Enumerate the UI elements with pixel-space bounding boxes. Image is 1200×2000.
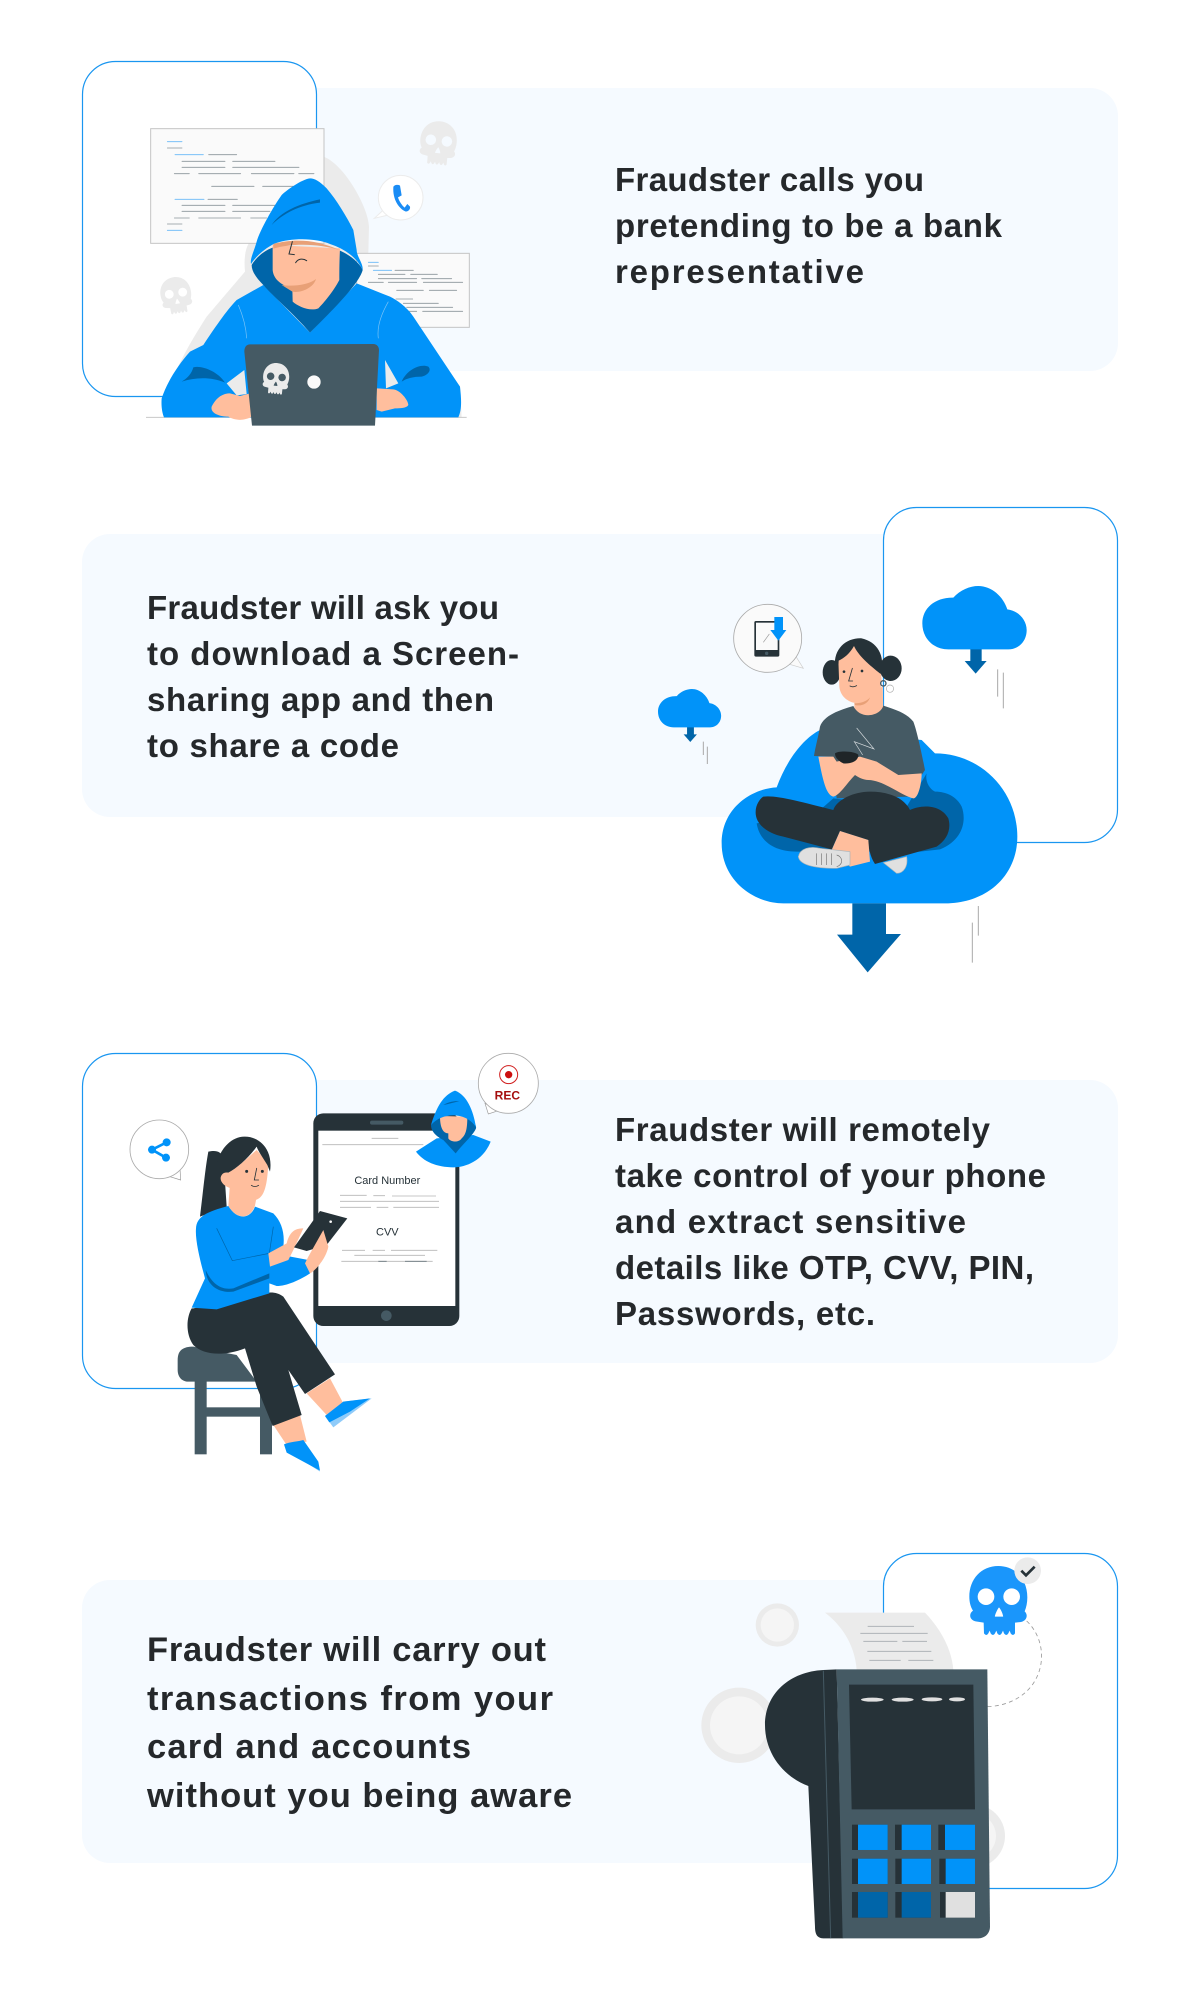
ring small	[756, 1603, 799, 1647]
beanbag shadow	[757, 773, 964, 852]
stool	[178, 1347, 272, 1454]
panel: step 4 card transactions	[82, 1554, 1118, 1938]
panel: step 1 fraudster calls	[82, 62, 1118, 426]
shin	[832, 831, 870, 867]
hair	[835, 638, 882, 674]
terminal edge highlight	[823, 1671, 831, 1938]
tablet	[294, 1211, 347, 1251]
illustration: woman on cloud beanbag	[658, 586, 1027, 972]
brim shadow on face	[273, 241, 339, 250]
shirt graphic	[854, 728, 874, 755]
text block: Fraudster will carry out	[147, 1631, 546, 1669]
neck	[228, 1183, 257, 1216]
hood fold	[272, 199, 320, 225]
terminal screen	[849, 1685, 975, 1809]
face details	[245, 1168, 264, 1187]
shoes	[798, 847, 907, 873]
text block	[146, 1631, 572, 1815]
large phone: Card Number	[354, 1175, 421, 1187]
shirt	[814, 706, 925, 798]
text block: Fraudster calls you	[615, 161, 924, 198]
dashed link	[985, 1621, 1042, 1707]
code document small	[357, 253, 469, 327]
shoes	[284, 1398, 372, 1472]
terminal body front	[837, 1669, 990, 1938]
front arm	[268, 1228, 303, 1267]
nose and cheek	[289, 242, 307, 263]
sweater shadow	[206, 1270, 269, 1292]
phone	[835, 752, 858, 763]
text block: without you being aware	[146, 1777, 572, 1815]
ponytail	[200, 1151, 227, 1217]
REC bubble: REC	[495, 1089, 520, 1103]
code document large	[151, 129, 324, 243]
text block: Passwords, etc.	[615, 1295, 875, 1332]
share bubble	[130, 1120, 189, 1180]
text block: Fraudster will remotely	[615, 1111, 991, 1148]
panel: step 2 download app	[82, 508, 1118, 972]
text block: representative	[615, 253, 864, 290]
gaps beside laptop	[227, 360, 398, 395]
face details	[843, 668, 894, 692]
hood top	[251, 178, 363, 270]
illustration: woman, phone and mini hacker	[130, 1053, 538, 1472]
hair buns	[823, 656, 902, 685]
text block: to download a Screen-	[147, 635, 519, 672]
text block	[615, 161, 1003, 290]
text block	[615, 1111, 1046, 1332]
large phone: CVV	[376, 1227, 399, 1239]
hands	[211, 388, 408, 420]
receipt	[825, 1613, 953, 1670]
grey skull left	[158, 275, 194, 316]
outline frame	[884, 508, 1118, 842]
tablet hand	[305, 1230, 328, 1273]
terminal body back	[765, 1669, 843, 1938]
ring large	[701, 1688, 777, 1763]
hood inner shadow	[252, 247, 363, 333]
pants	[756, 792, 949, 864]
arms and hands	[818, 757, 922, 798]
illustration: card terminal and skull	[701, 1557, 1042, 1938]
laptop	[244, 344, 379, 426]
illustration: hooded hacker at laptop	[146, 119, 469, 426]
REC bubble	[478, 1053, 538, 1114]
text block: details like OTP, CVV, PIN,	[615, 1249, 1034, 1286]
down arrow	[837, 903, 901, 972]
panel: step 3 remote control	[82, 1053, 1118, 1472]
blue skull	[969, 1566, 1027, 1635]
check badge	[1014, 1557, 1041, 1584]
text block	[147, 589, 519, 764]
hoodie seam lines	[238, 302, 388, 338]
ground line	[146, 416, 467, 419]
hoodie body	[161, 283, 461, 417]
panel background	[82, 1080, 1118, 1363]
grey skull top right	[418, 119, 459, 167]
phone call bubble	[374, 175, 423, 220]
motion lines	[703, 669, 1003, 963]
face	[221, 1150, 268, 1200]
cloud large	[922, 586, 1027, 674]
pants	[187, 1292, 335, 1426]
text block: take control of your phone	[615, 1157, 1046, 1194]
panel background	[82, 1580, 1118, 1863]
download bubble	[734, 604, 803, 672]
tablet camera	[329, 1220, 332, 1223]
outline frame	[82, 1054, 316, 1388]
text block: and extract sensitive	[615, 1203, 966, 1240]
text block: pretending to be a bank	[615, 207, 1003, 244]
keypad	[852, 1825, 975, 1918]
panel background	[82, 88, 1118, 371]
chin shadow	[854, 697, 870, 705]
sweater	[192, 1206, 310, 1309]
panel background	[82, 534, 1118, 817]
face	[273, 245, 340, 309]
text block: sharing app and then	[147, 681, 494, 718]
text block: transactions from your	[147, 1680, 553, 1718]
grey backdrop shape	[166, 157, 462, 417]
chin shadow	[282, 279, 316, 292]
outline frame	[884, 1554, 1118, 1888]
face	[838, 645, 882, 703]
mini hacker	[416, 1091, 491, 1167]
text block: Fraudster will ask you	[147, 589, 499, 626]
beanbag	[722, 730, 1017, 903]
large phone	[313, 1113, 459, 1326]
cloud small	[658, 689, 721, 742]
neck	[854, 687, 883, 718]
sleeve seam	[217, 1227, 273, 1261]
outline frame	[82, 62, 316, 396]
shins	[273, 1378, 343, 1445]
text block: card and accounts	[147, 1728, 471, 1766]
text block: to share a code	[147, 727, 399, 764]
ring right	[942, 1804, 1005, 1868]
hair	[217, 1137, 271, 1180]
hoodie folds	[182, 366, 430, 383]
